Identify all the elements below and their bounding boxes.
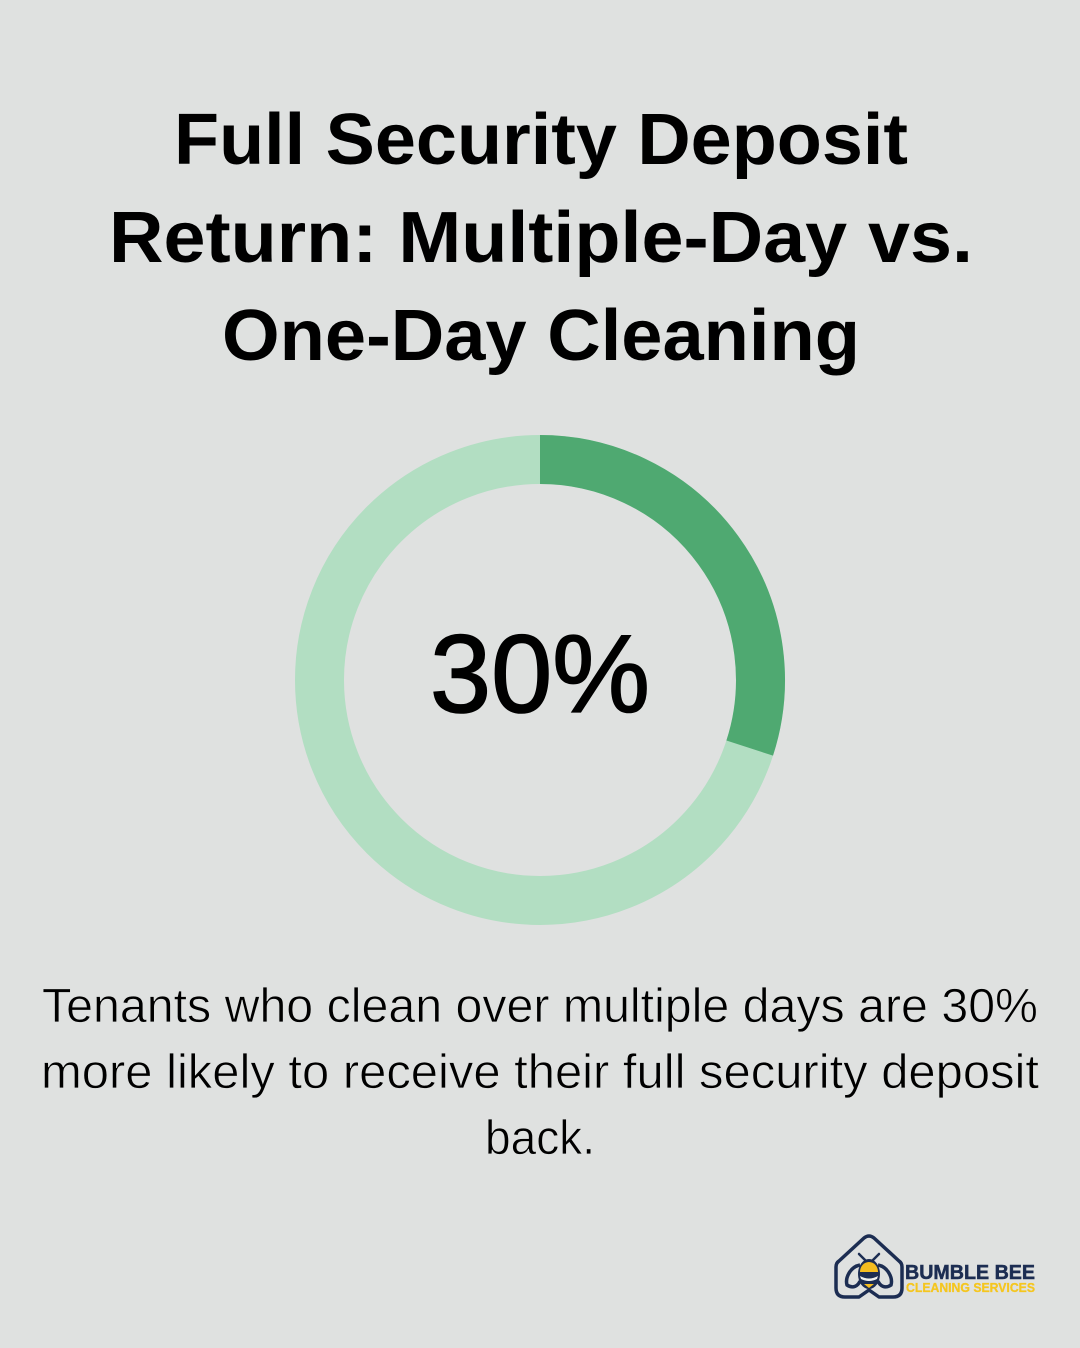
donut value: 30% [430, 613, 650, 736]
donut chart: 30% [320, 460, 760, 900]
title: Return: Multiple-Day vs. [109, 198, 973, 278]
icon: house with bee [836, 1236, 902, 1297]
brand tagline: CLEANING SERVICES [906, 1281, 1035, 1295]
title [109, 100, 973, 376]
title: One-Day Cleaning [222, 296, 860, 376]
description text: back. [485, 1112, 595, 1165]
description text: more likely to receive their full security deposit [41, 1046, 1039, 1099]
description text: Tenants who clean over multiple days are 30% [42, 980, 1038, 1033]
title: Full Security Deposit [174, 100, 908, 180]
brand name: BUMBLE BEE [905, 1262, 1035, 1284]
description text [41, 980, 1039, 1165]
logo: Bumble Bee Cleaning Services [836, 1236, 1035, 1297]
